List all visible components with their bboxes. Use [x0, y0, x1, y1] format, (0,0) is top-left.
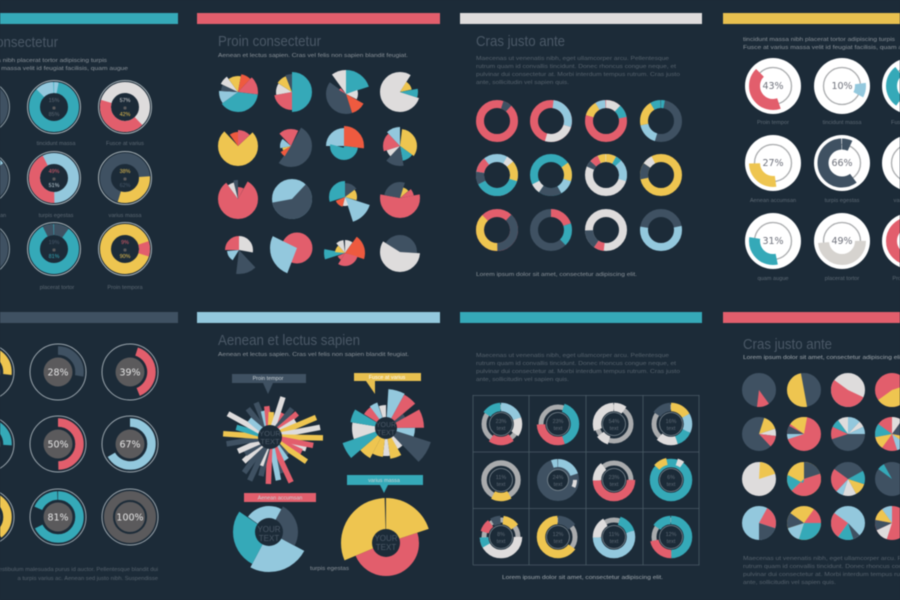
panel: donut grid: [460, 312, 702, 581]
pie 10: [796, 470, 812, 488]
grid donut values: text: [554, 482, 563, 488]
panel bar: [723, 312, 900, 323]
ring 67: [102, 416, 158, 472]
ring chart 15 85: 85%: [49, 112, 60, 118]
ring labels: placerat tortor: [40, 285, 74, 291]
ring chart 57 42: [98, 80, 152, 134]
panel bar: [723, 13, 900, 24]
gauge 49: [814, 213, 870, 269]
ring labels: Proin tempora: [107, 285, 143, 291]
pie 6: [796, 426, 812, 442]
intro text: Fusce at varius massa velit id feugiat facilisis, quam augue: [743, 45, 900, 51]
donut 8: [644, 158, 678, 192]
ring chart 57 42: 42%: [120, 112, 131, 118]
panel bar: [197, 312, 440, 323]
exploded pie 12: [390, 188, 410, 208]
tag: slate: Proin tempor: [253, 376, 284, 382]
panel bar: [460, 312, 702, 323]
ring chart 19 81: 19%: [49, 240, 60, 246]
gauge 10: 10%: [831, 81, 853, 92]
ring chart partial 3: [0, 222, 10, 276]
hub text 2: YOUR: [376, 422, 396, 429]
intro text: [0, 58, 128, 72]
grid donut 12: [654, 520, 688, 554]
ring chart 19 81: 81%: [49, 254, 60, 260]
tag: teal: varius massa: [368, 478, 400, 484]
gauge labels: [750, 120, 900, 282]
panel bar: [0, 13, 178, 24]
heading: Aenean et lectus sapien: [218, 332, 360, 349]
grid donut values: 12%: [666, 532, 677, 538]
exploded pie 15: [334, 242, 356, 264]
gauge 31: 31%: [762, 236, 784, 247]
footer note: Lorem ipsum dolor sit amet, consectetur adipiscing elit.: [476, 272, 637, 278]
gauge 10: [814, 58, 870, 114]
panel: percent rings with grey hub: [0, 312, 178, 582]
hub text 1: [259, 429, 281, 446]
gauge 27: [745, 135, 801, 191]
donut 10: [534, 213, 568, 247]
exploded pie 1: [228, 82, 248, 102]
hub text 3: [257, 525, 281, 543]
gauge labels: tincidunt massa: [823, 120, 862, 126]
grid donut values: text: [554, 539, 563, 545]
hub text 2: [376, 422, 396, 437]
ring labels: varius massa: [109, 213, 142, 219]
pie 7: [840, 426, 856, 442]
pie 12: [884, 470, 900, 488]
tag: yellow: Fusce at varius: [369, 375, 406, 381]
grid lines: [473, 395, 700, 565]
panel: ring pairs, top left: [0, 13, 178, 291]
subheading: Aenean et lectus sapien. Cras vel felis non sapien blandit feugiat.: [218, 352, 409, 358]
paragraph: ante, sollicitudin vel sapien quis.: [476, 377, 569, 383]
gauge labels: Proin tempor: [757, 120, 789, 126]
grid donut values: 12%: [553, 532, 564, 538]
gauge 66: [814, 135, 870, 191]
exploded pie 3: [334, 82, 358, 106]
pie 2: [796, 382, 812, 398]
ring chart 38 62: 62%: [120, 183, 131, 189]
gauge 43: 43%: [762, 81, 784, 92]
exploded pie 8: [390, 136, 410, 156]
ring 50: 50%: [47, 440, 69, 450]
side label: turpis egestas: [310, 566, 349, 572]
hub text 1: YOUR: [259, 429, 281, 438]
grid donut values: text: [497, 482, 506, 488]
grid donut values: 6%: [667, 475, 675, 481]
ring labels: tincidunt massa: [37, 141, 76, 147]
donut 1: [480, 104, 514, 138]
hub text 3: TEXT: [259, 534, 279, 543]
ring 39: 39%: [119, 368, 141, 378]
pie 3: [840, 382, 856, 398]
donut 9: [480, 213, 514, 247]
grid donut 5: [484, 463, 518, 497]
heading: Cras justo ante: [743, 336, 832, 353]
footer note: Lorem ipsum dolor sit amet, consectetur adipiscing elit.: [502, 575, 663, 581]
grid donut values: text: [610, 539, 619, 545]
grid donut 8: [652, 461, 690, 499]
tag: red: [244, 493, 316, 502]
ring 28: 28%: [47, 368, 69, 378]
grid donut values: text: [667, 482, 676, 488]
donut 2: [534, 104, 568, 138]
grid donut 11: [597, 520, 631, 554]
panel bar: [460, 13, 702, 24]
grid donut 1: [484, 407, 518, 441]
pie 13: [750, 514, 768, 532]
ring partial yellow: [0, 344, 14, 400]
paragraph: pulvinar dui consectetur at. Morbi interdum tempus rutrum. Cras justo: [476, 369, 680, 375]
exploded pie 14: [284, 234, 310, 262]
grid donut values: 54%: [609, 419, 620, 425]
tag: slate: [232, 374, 306, 394]
grid donut values: 23%: [609, 475, 620, 481]
pie 16: [884, 514, 900, 532]
ring chart 15 85: [28, 80, 80, 134]
hub text 4: TEXT: [376, 543, 396, 552]
exploded pie 7: [334, 136, 354, 156]
gauge 31: [745, 213, 801, 269]
ring partial yellow lower: [0, 489, 14, 545]
subheading: Lorem ipsum dolor sit amet, consectetur adipiscing elit.: [743, 355, 900, 361]
pie 9: [750, 470, 768, 488]
grid donut values: 23%: [553, 419, 564, 425]
donut 6: [534, 158, 568, 192]
exploded pie 6: [280, 136, 302, 156]
exploded pie 11: [332, 184, 358, 210]
panel: percent gauges on white discs: [723, 13, 900, 282]
donut 5: [480, 158, 514, 192]
exploded pie 5: [228, 136, 248, 156]
ring chart 38 62: 38%: [120, 169, 131, 175]
pie 14: [796, 514, 812, 532]
ring chart 57 42: 57%: [120, 98, 131, 104]
sunburst chart 1: [223, 397, 323, 484]
panel bar: [0, 312, 178, 323]
paragraph: ante, sollicitudin vel sapien quis.: [476, 80, 569, 86]
grid donut values: text: [610, 482, 619, 488]
intro text: [743, 37, 900, 51]
donut 3: [589, 104, 623, 138]
paragraph: pulvinar dui consectetur at. Morbi interdum tempus rutrum. Cras justo: [476, 72, 680, 78]
gauge 27: 27%: [762, 158, 784, 169]
pie 15: [840, 514, 856, 532]
exploded pie 9: [228, 189, 248, 209]
ring 50: [30, 416, 86, 472]
paragraph: [476, 353, 680, 383]
grid donut values: 16%: [666, 419, 677, 425]
hub text 3: YOUR: [257, 525, 281, 534]
panel: plain donuts: [460, 13, 702, 278]
exploded pie 13: [227, 238, 251, 262]
ring partial teal: [0, 416, 14, 472]
ring chart 9 90: [98, 222, 152, 276]
panel: multi-slice pies: [723, 312, 900, 586]
gauge labels: placerat tortor: [825, 276, 859, 282]
gauge 43: [745, 58, 801, 114]
ring labels: turpis egestas: [39, 213, 74, 219]
grid donut values: 23%: [496, 419, 507, 425]
grid donut values: text: [667, 539, 676, 545]
panel: radial charts with tags: [197, 312, 440, 572]
grid donut values: [496, 419, 677, 545]
intro text: tincidunt massa nibh placerat tortor adipiscing turpis: [743, 37, 895, 43]
donut 7: [589, 158, 623, 192]
exploded pie 10: [282, 189, 302, 209]
hub text 1: TEXT: [260, 437, 280, 446]
grid donut values: text: [497, 426, 506, 432]
footer text: a turpis varius ac. Aenean sed justo nibh. Suspendisse: [17, 576, 158, 582]
ring chart 19 81: [28, 222, 80, 276]
pie 1: [750, 382, 768, 398]
donut 4: [644, 104, 678, 138]
grid donut 6: [541, 463, 575, 497]
gauge labels: turpis egestas: [825, 198, 860, 204]
ring chart 49 51: 51%: [49, 183, 60, 189]
gauge labels: quam augue: [757, 276, 789, 282]
ring 81: [30, 489, 86, 545]
ring 100: [102, 489, 158, 545]
footer text: [0, 567, 158, 582]
paragraph: [476, 56, 680, 86]
radial donut 3: [249, 512, 289, 552]
paragraph: [743, 556, 900, 586]
ring 67: 67%: [119, 440, 141, 450]
ring chart 9 90: 90%: [120, 254, 131, 260]
grid donut 2: [541, 407, 575, 441]
paragraph: Maecenas ut venenatis nibh, eget ullamcorper arcu. Pellentesque: [476, 353, 669, 359]
hub text 4: [374, 534, 398, 552]
paragraph: ante, sollicitudin vel sapien quis.: [743, 580, 836, 586]
ring 28: [30, 344, 86, 400]
exploded pie 4: [390, 82, 410, 102]
pie 11: [840, 470, 856, 488]
pie 5: [750, 426, 768, 442]
tag: yellow: [354, 373, 421, 394]
grid donut values: text: [610, 426, 619, 432]
paragraph: rutrum quam id convallis tincidunt. Donec rhoncus congue neque, et: [476, 64, 676, 70]
ring chart 15 85: 15%: [49, 98, 60, 104]
gauge partial red: [882, 213, 900, 269]
radial donut 4: [364, 520, 408, 566]
heading: Cras justo ante: [476, 33, 565, 50]
grid donut values: 24%: [553, 475, 564, 481]
gauge partial teal: [882, 58, 900, 114]
grid donut 10: [541, 520, 575, 554]
donut 11: [589, 213, 623, 247]
grid donut 7: [597, 463, 631, 497]
grid donut 9: [484, 520, 518, 554]
grid donut values: 11%: [496, 475, 506, 481]
pie 8: [884, 426, 900, 442]
paragraph: rutrum quam id convallis tincidunt. Donec rhoncus congue neque, et: [476, 361, 676, 367]
hub text 4: YOUR: [374, 534, 398, 543]
donut 12: [644, 213, 678, 247]
grid donut values: text: [554, 426, 563, 432]
ring 81: 81%: [47, 512, 69, 524]
grid donut values: 11%: [609, 532, 619, 538]
exploded pie 2: [282, 82, 302, 102]
panel bar: [197, 13, 440, 24]
hub text 2: TEXT: [377, 430, 396, 437]
ring chart partial 1: [0, 80, 10, 134]
paragraph: Maecenas ut venenatis nibh, eget ullamcorper arcu. Pellentesque: [476, 56, 669, 62]
tag: teal: [347, 475, 423, 493]
ring chart 9 90: 9%: [121, 240, 129, 246]
panel: exploded pies: [197, 13, 440, 264]
grid donut 4: [654, 407, 688, 441]
ring labels: [0, 141, 144, 291]
grid donut values: 8%: [497, 532, 505, 538]
ring 39: [102, 344, 158, 400]
ring chart 49 51: 49%: [49, 169, 60, 175]
sunburst chart 2: [362, 404, 410, 452]
gauge labels: Aenean accumsan: [750, 198, 796, 204]
gauge 49: 49%: [831, 236, 853, 247]
pie 4: [884, 382, 900, 398]
ring chart 49 51: [28, 152, 80, 204]
exploded pie 16: [390, 242, 410, 262]
footer text: Vestibulum malesuada purus id auctor. Pellentesque blandit dui: [0, 567, 158, 573]
ring 100: 100%: [116, 512, 144, 524]
gauge partial plain: [882, 135, 900, 191]
subheading: Aenean et lectus sapien. Cras vel felis non sapien blandit feugiat.: [218, 53, 408, 59]
ring chart partial 2: [0, 152, 10, 204]
grid donut values: text: [667, 426, 676, 432]
tag: red: Aenean accumsan: [258, 496, 302, 502]
ring chart 38 62: [98, 152, 152, 204]
grid donut 3: [597, 407, 631, 441]
ring labels: Fusce at varius: [106, 141, 144, 147]
grid donut values: text: [497, 539, 506, 545]
gauge 66: 66%: [831, 158, 853, 169]
heading: Proin consectetur: [218, 33, 321, 50]
